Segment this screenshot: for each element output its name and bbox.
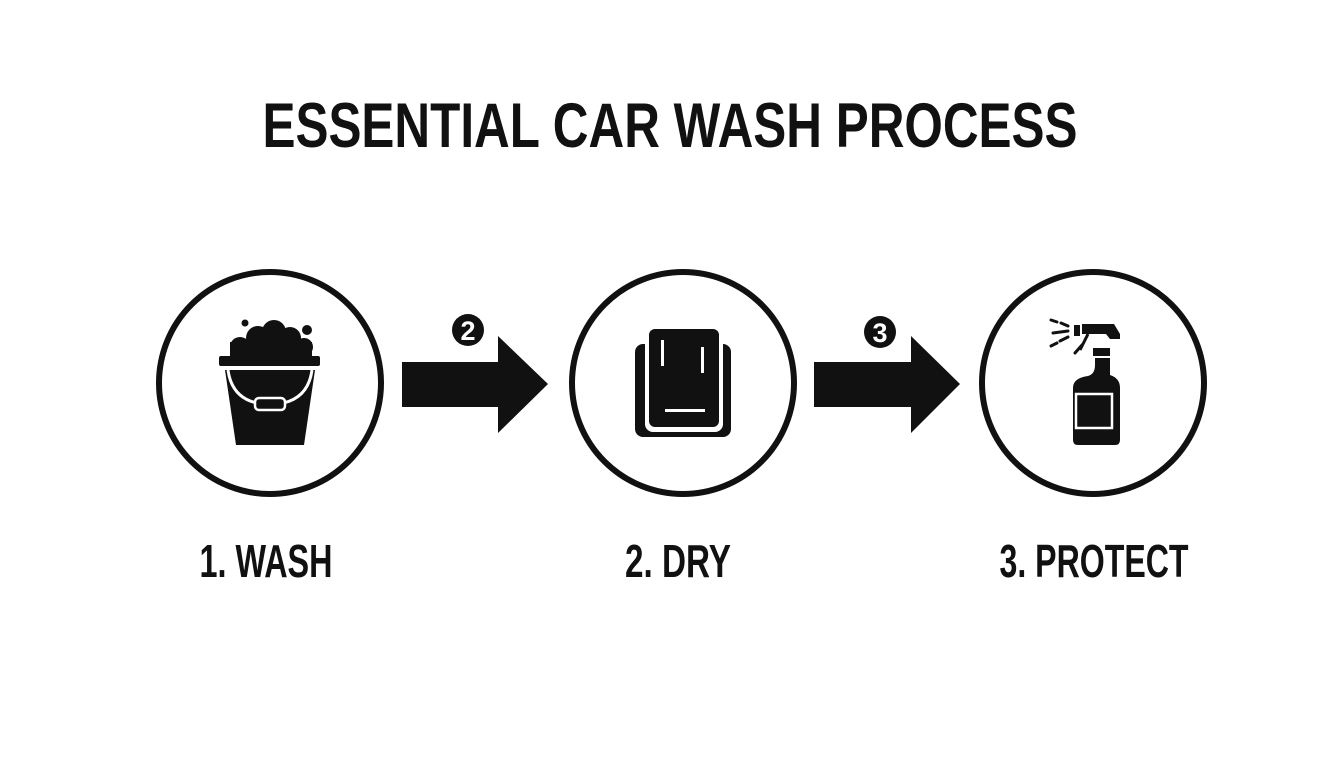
label: wash: 1. WASH (200, 535, 332, 587)
label: dry: 2. DRY (625, 535, 731, 587)
badge 2: 2 (460, 316, 476, 346)
circle: dry (572, 272, 794, 494)
badge 2 (452, 314, 484, 346)
badge 3 (864, 316, 896, 348)
step 2: dry (572, 272, 794, 587)
arrow 1 (402, 314, 548, 433)
step 1: wash (159, 272, 381, 587)
arrow 2 (814, 316, 960, 433)
icon: bucket with foam (219, 320, 320, 445)
title: ESSENTIAL CAR WASH PROCESS (262, 91, 1078, 161)
icon: towel (635, 325, 731, 437)
circle: protect (982, 272, 1204, 494)
step 3: protect (982, 272, 1204, 587)
icon: spray bottle (1051, 320, 1120, 445)
circle: wash (159, 272, 381, 494)
badge 3: 3 (872, 318, 888, 348)
label: protect: 3. PROTECT (1000, 535, 1188, 587)
